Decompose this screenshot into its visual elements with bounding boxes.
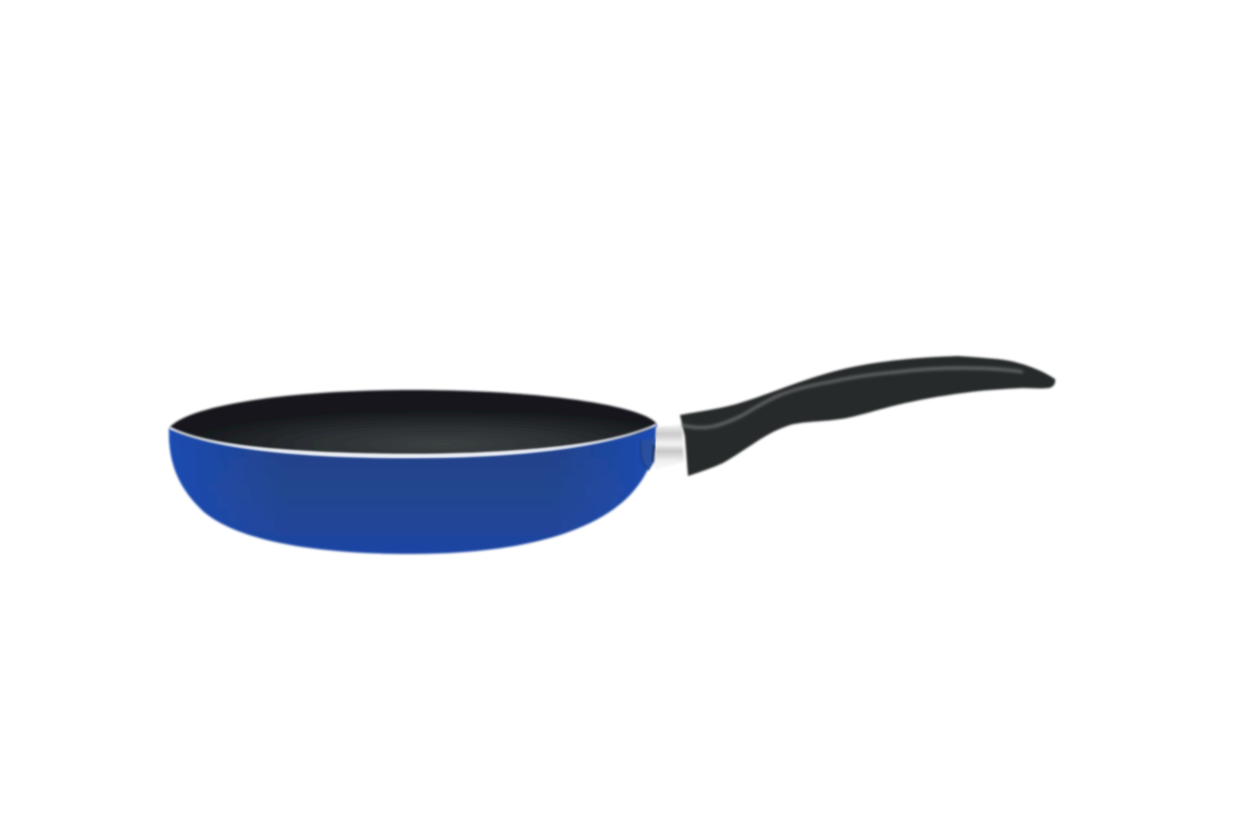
rim highlight — [170, 425, 656, 456]
pan interior — [170, 390, 656, 454]
pan body — [169, 424, 657, 554]
rivet on pan side — [640, 438, 655, 470]
handle grip — [680, 356, 1055, 476]
metal bracket — [654, 425, 684, 470]
handle highlight — [682, 368, 1023, 428]
handle — [680, 356, 1055, 476]
